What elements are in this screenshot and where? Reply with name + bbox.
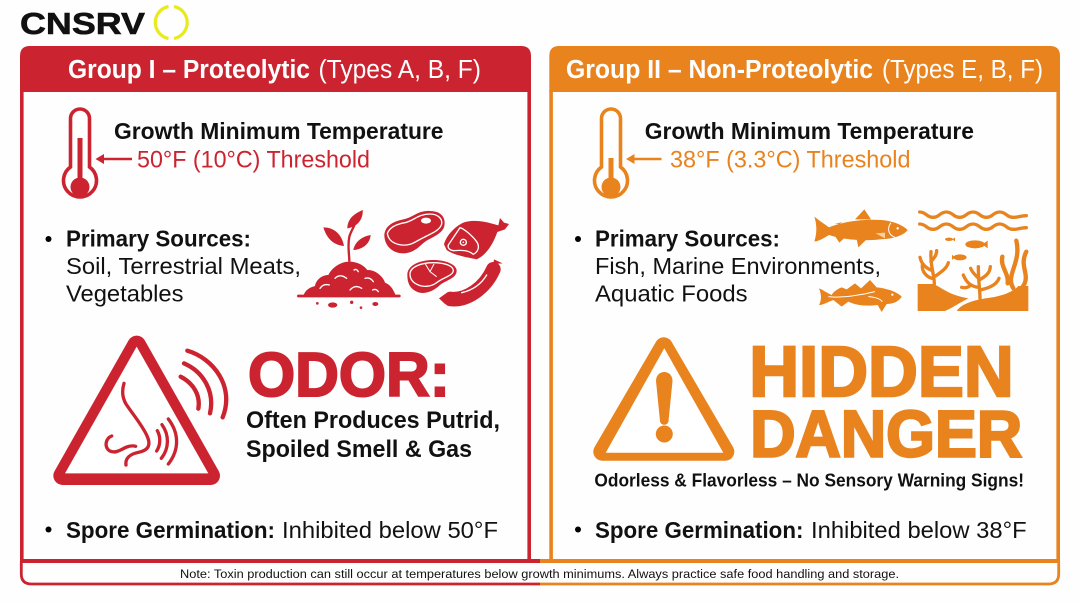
header bar: Group I: (Types A, B, F) xyxy=(318,56,481,84)
spore germination bullet: Spore Germination: xyxy=(66,517,275,543)
footer note box xyxy=(20,561,1060,584)
hidden danger heading: DANGER xyxy=(750,396,1022,470)
icon: t-bone steak xyxy=(407,260,457,293)
icon: thermometer red xyxy=(64,109,97,197)
icon: salmon xyxy=(814,209,908,247)
primary sources list xyxy=(575,226,881,306)
icon: soil mound with sprout xyxy=(298,210,399,309)
spore germination bullet xyxy=(575,517,1027,543)
icon: cod xyxy=(819,280,902,312)
logo: CNSRV xyxy=(20,6,187,41)
icon: waves xyxy=(920,212,1026,229)
hidden danger heading: HIDDEN xyxy=(749,332,1014,412)
icon: warning triangle with exclamation xyxy=(602,346,725,453)
threshold text: 38°F (3.3°C) Threshold xyxy=(670,146,910,174)
odor description xyxy=(246,407,500,463)
primary sources list: Vegetables xyxy=(66,280,184,306)
icon: warning triangle with nose xyxy=(63,345,226,476)
footer note text: Note: Toxin production can still occur at temperatures below growth minimums. Always practice safe food handling and storage. xyxy=(180,567,899,581)
header bar: Group II: (Types E, B, F) xyxy=(882,56,1043,84)
icon: sausage xyxy=(439,259,503,304)
primary sources list: Fish, Marine Environments, xyxy=(595,253,881,279)
header bar: Group II xyxy=(549,46,1060,92)
spore germination bullet: Inhibited below 38°F xyxy=(811,517,1027,543)
icon: small fish xyxy=(945,237,988,260)
arrow to threshold xyxy=(626,154,662,164)
primary sources list: Primary Sources: xyxy=(595,226,780,252)
icon: fish and marine scene xyxy=(814,209,1028,312)
primary sources list: Primary Sources: xyxy=(66,226,251,252)
spore germination bullet: Inhibited below 50°F xyxy=(282,517,498,543)
spore germination bullet xyxy=(46,517,498,543)
icon: seabed with coral and kelp xyxy=(918,241,1028,311)
hidden danger heading xyxy=(749,332,1022,470)
panel frame red xyxy=(22,90,529,561)
panel frame orange xyxy=(551,90,1058,561)
icon: thermometer orange xyxy=(594,109,627,197)
odor description: Often Produces Putrid, xyxy=(246,407,500,434)
icon: soil, plant and meats xyxy=(298,210,509,309)
growth temperature heading: Growth Minimum Temperature xyxy=(114,118,444,144)
panel: Group II Non-Proteolytic xyxy=(549,46,1060,561)
panel: Group I Proteolytic xyxy=(20,46,531,561)
header bar: Group I xyxy=(20,46,531,92)
growth temperature heading: Growth Minimum Temperature xyxy=(645,118,974,144)
header bar: Group I: Group I – Proteolytic xyxy=(68,56,310,84)
arrow to threshold xyxy=(96,154,132,164)
primary sources list: Aquatic Foods xyxy=(595,280,748,306)
odor description: Spoiled Smell & Gas xyxy=(246,436,472,463)
header bar: Group II: Group II – Non-Proteolytic xyxy=(566,56,873,84)
spore germination bullet: Spore Germination: xyxy=(595,517,803,543)
hidden danger description: Odorless & Flavorless – No Sensory Warning Signs! xyxy=(594,471,1024,491)
primary sources list: Soil, Terrestrial Meats, xyxy=(66,253,301,279)
odor heading: ODOR: xyxy=(248,340,450,410)
logo wordmark: CNSRV xyxy=(20,6,145,41)
icon: ham xyxy=(444,218,509,259)
threshold text: 50°F (10°C) Threshold xyxy=(137,146,370,174)
icon: steak xyxy=(384,211,445,253)
primary sources list xyxy=(46,226,301,306)
logo ring icon xyxy=(155,6,187,38)
